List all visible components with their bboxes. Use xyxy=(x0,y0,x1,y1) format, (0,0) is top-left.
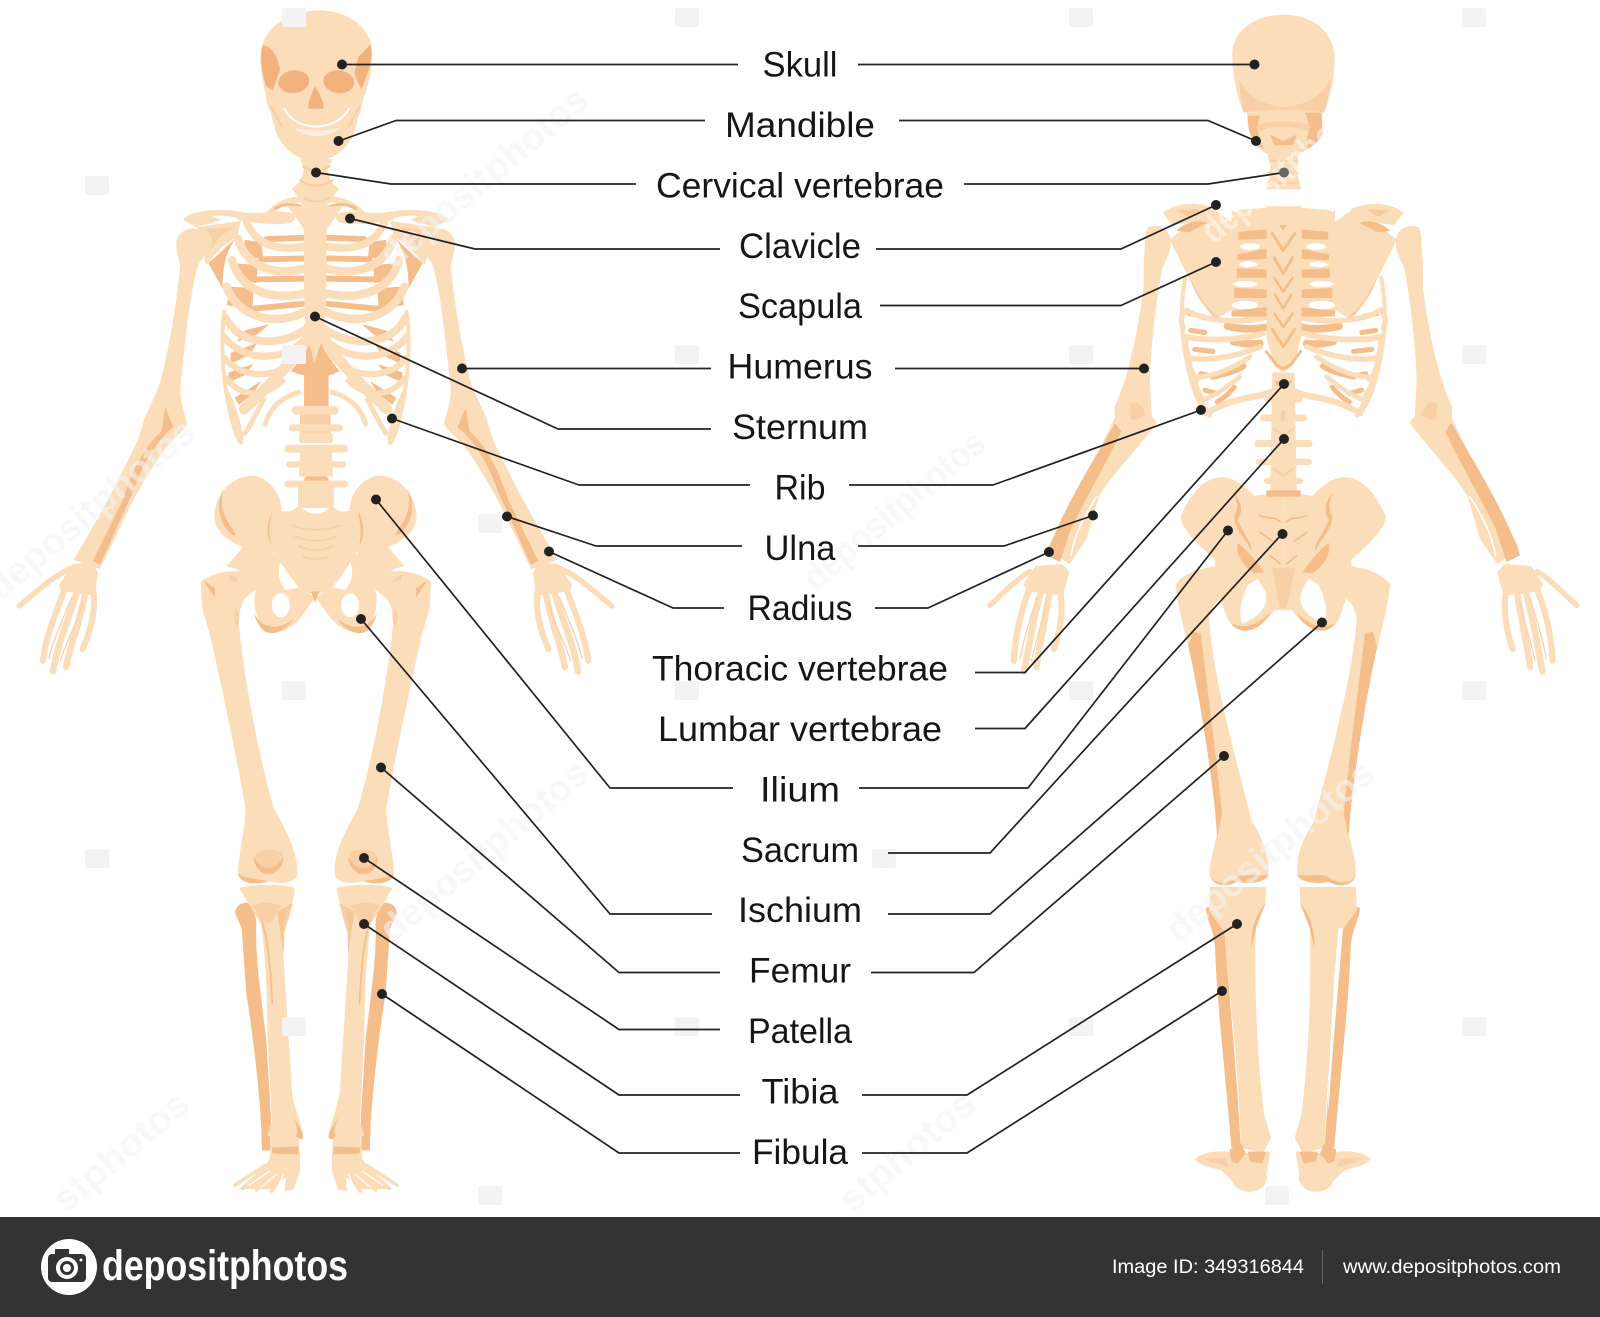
clavicle gap xyxy=(213,216,239,223)
label: Radius: Radius xyxy=(748,589,852,628)
cranium xyxy=(1232,15,1335,113)
label: Tibia: Tibia xyxy=(762,1072,839,1111)
lower ribs xyxy=(1181,278,1283,416)
leader lines and dots xyxy=(310,60,1327,1153)
front upper body xyxy=(19,11,612,671)
leaders: tibia xyxy=(359,919,1242,1095)
stock watermark text xyxy=(0,78,1383,1221)
cervical vertebrae xyxy=(292,159,339,206)
stock watermark text: depositphotos xyxy=(372,752,597,951)
label: Humerus: Humerus xyxy=(728,348,872,387)
leaders: scapula xyxy=(880,257,1221,306)
label: Thoracic vertebrae: Thoracic vertebrae xyxy=(652,650,948,689)
toes xyxy=(235,1156,300,1192)
mandible xyxy=(267,99,363,162)
leaders: ulna xyxy=(502,510,1098,546)
first rib xyxy=(265,200,312,219)
centre labels column xyxy=(652,46,948,1172)
icon: depositphotos camera logo xyxy=(41,1239,97,1295)
label: Fibula: Fibula xyxy=(752,1133,849,1172)
stock watermark text: depositphotos xyxy=(795,422,994,599)
label: Scapula: Scapula xyxy=(738,287,863,326)
front skeleton: anterior view xyxy=(19,11,612,1192)
leaders: femur xyxy=(376,751,1229,972)
back skeleton: posterior view xyxy=(990,15,1577,1192)
teeth line xyxy=(284,109,349,127)
ilium shade xyxy=(219,489,235,535)
leaders: thoracic vertebrae xyxy=(975,379,1289,672)
forearm bones xyxy=(73,426,186,569)
tibia shade xyxy=(1251,904,1265,948)
patella xyxy=(254,855,284,874)
label: Lumbar vertebrae: Lumbar vertebrae xyxy=(658,710,942,749)
fibula xyxy=(1206,904,1241,1148)
leaders: humerus xyxy=(457,364,1149,374)
left half of front torso and arm xyxy=(19,200,315,671)
front legs xyxy=(201,571,431,1192)
forearm xyxy=(1048,417,1157,564)
fibula xyxy=(235,903,271,1150)
tibia xyxy=(1209,887,1271,1154)
hand xyxy=(19,562,98,671)
footer bar xyxy=(0,1217,1600,1317)
nasal cavity xyxy=(308,86,324,109)
right front leg mirror xyxy=(329,571,431,1192)
left half of back torso and arm xyxy=(990,200,1287,671)
leaders: ilium xyxy=(371,494,1233,788)
label: Sternum: Sternum xyxy=(732,408,868,447)
tibia xyxy=(239,885,303,1139)
humerus xyxy=(143,228,207,430)
pelvis half xyxy=(1180,477,1283,631)
temple right xyxy=(354,44,371,89)
leaders: rib xyxy=(387,405,1206,485)
leaders: clavicle xyxy=(345,200,1221,249)
leaders: cervical vertebrae xyxy=(311,168,1289,184)
scapula xyxy=(1170,209,1233,319)
back upper body xyxy=(990,15,1577,671)
stock watermark text: depositphotos xyxy=(1158,752,1383,951)
ilium xyxy=(214,476,288,556)
thoracic spine with chevrons xyxy=(1266,206,1302,372)
femur shade xyxy=(1189,632,1222,837)
tibia shade xyxy=(260,916,272,1003)
left back leg xyxy=(1176,567,1271,1192)
lower spine xyxy=(284,324,348,508)
eye sockets xyxy=(277,69,310,95)
logo wordmark: depositphotos xyxy=(102,1242,348,1290)
leaders: sacrum xyxy=(888,529,1288,853)
stock watermark text: stphotos xyxy=(831,1083,984,1221)
hip joint xyxy=(237,568,261,600)
right back leg mirror xyxy=(1295,567,1390,1192)
stock watermark text: depositphotos xyxy=(372,78,597,277)
leaders: radius xyxy=(544,546,1054,608)
skull xyxy=(260,11,372,162)
skull back xyxy=(1232,15,1335,183)
site url: www.depositphotos.com xyxy=(1342,1257,1561,1278)
label: Patella: Patella xyxy=(748,1012,853,1051)
upper ribs shading xyxy=(1231,200,1267,317)
hip shade xyxy=(229,575,245,583)
obturator foramen xyxy=(272,593,290,617)
rib shading xyxy=(208,238,304,405)
right fibula gap xyxy=(1328,928,1343,1114)
sacrum detail xyxy=(1260,516,1307,608)
label: Femur: Femur xyxy=(749,952,851,991)
femur xyxy=(1176,567,1269,885)
hand xyxy=(990,564,1069,671)
leaders: skull xyxy=(337,60,1260,70)
leaders: lumbar vertebrae xyxy=(975,434,1289,728)
leaders: patella xyxy=(359,853,720,1030)
acromion xyxy=(1163,204,1216,225)
lumbar spine xyxy=(1255,372,1313,497)
radius shade xyxy=(1047,423,1121,562)
label: Ischium: Ischium xyxy=(738,891,862,930)
stock watermark camera icons xyxy=(85,8,1486,1205)
cervical vertebrae xyxy=(1266,149,1301,189)
occipital base xyxy=(1247,109,1322,153)
label: Sacrum: Sacrum xyxy=(741,831,859,870)
label: Skull: Skull xyxy=(762,46,838,85)
ulna gap xyxy=(1071,497,1097,556)
right half of back torso and arm xyxy=(1280,200,1577,671)
leaders: ischium xyxy=(356,614,1327,914)
image id: Image ID: 349316844 xyxy=(1112,1257,1304,1278)
leaders: sternum xyxy=(310,312,711,429)
hip socket xyxy=(1176,566,1221,614)
pubis and ischium xyxy=(227,543,315,632)
lower ribs shading xyxy=(1189,314,1264,402)
label: Cervical vertebrae: Cervical vertebrae xyxy=(656,166,944,205)
femur xyxy=(201,571,297,883)
tarsus and calcaneus xyxy=(1195,1144,1270,1192)
right half of front torso and arm xyxy=(316,200,612,671)
divider xyxy=(1322,1250,1323,1284)
ribs xyxy=(222,222,310,443)
stock watermark text: depositphotos xyxy=(1193,85,1381,252)
back legs xyxy=(1176,567,1390,1192)
temple left xyxy=(261,45,280,90)
cranium xyxy=(260,11,372,124)
label: Ilium: Ilium xyxy=(760,770,840,809)
ankle and tarsus xyxy=(269,1136,300,1169)
radius shade xyxy=(93,407,173,565)
upper thoracic block xyxy=(1231,206,1287,320)
clavicle xyxy=(183,210,295,227)
left front leg xyxy=(201,571,303,1192)
label: Ulna: Ulna xyxy=(764,529,836,568)
scapula xyxy=(197,221,241,265)
leaders: fibula xyxy=(377,986,1227,1153)
sacrum xyxy=(269,504,361,603)
stock watermark text: stphotos xyxy=(45,1083,198,1221)
humerus xyxy=(1114,226,1171,423)
label: Clavicle: Clavicle xyxy=(739,227,861,266)
label: Mandible: Mandible xyxy=(725,106,875,145)
sternum xyxy=(288,206,343,326)
trochanter shade xyxy=(234,608,239,628)
label: Rib: Rib xyxy=(774,468,826,507)
leaders: mandible xyxy=(334,120,1261,146)
